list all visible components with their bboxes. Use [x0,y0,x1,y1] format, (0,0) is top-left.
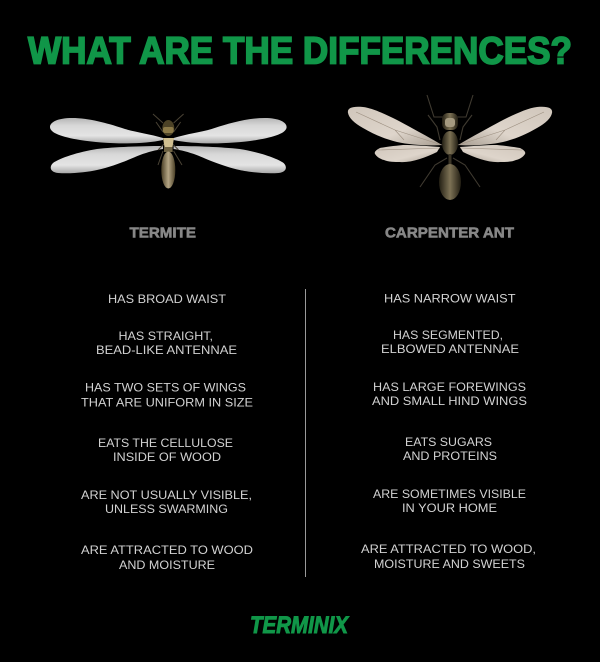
ant fact: waist: HAS NARROW WAIST [384,292,516,306]
ant fact: attraction: ARE ATTRACTED TO WOOD, [361,543,536,556]
ant fact: antennae: ELBOWED ANTENNAE [381,343,519,356]
ant fact: wings [372,381,527,408]
ant body [439,113,461,200]
termite fact: waist: HAS BROAD WAIST [108,293,226,306]
termite right wings [174,118,287,173]
termite fact: antennae: BEAD-LIKE ANTENNAE [96,344,237,357]
termite fact: visibility: ARE NOT USUALLY VISIBLE, [81,489,252,502]
ant fact: antennae [381,329,519,356]
termite fact: wings: THAT ARE UNIFORM IN SIZE [81,396,253,410]
termite fact: antennae [96,330,237,357]
termite fact: diet: EATS THE CELLULOSE [98,437,233,450]
termite fact: antennae: HAS STRAIGHT, [118,330,213,343]
ant antennae and legs [420,95,480,187]
ant fact: diet [403,436,497,463]
ant fact: antennae: HAS SEGMENTED, [393,329,503,342]
illustration: termite [50,114,287,188]
ant fact: wings: AND SMALL HIND WINGS [372,395,527,408]
divider [305,289,306,577]
termite antennae and legs [153,114,184,165]
title: WHAT ARE THE DIFFERENCES? [28,30,572,72]
termite fact: visibility: UNLESS SWARMING [105,503,228,516]
termite fact: diet: INSIDE OF WOOD [113,451,221,464]
termite left wings [50,118,163,173]
termite fact: visibility [81,489,252,516]
ant fact: visibility [373,488,526,515]
termite body [161,120,175,188]
termite fact: attraction: ARE ATTRACTED TO WOOD [81,544,253,557]
label: carpenter ant: CARPENTER ANT [385,224,514,242]
termite fact: diet [98,437,233,464]
ant fact: attraction: MOISTURE AND SWEETS [374,558,525,571]
termite fact: attraction [81,544,253,572]
ant fact: wings: HAS LARGE FOREWINGS [373,381,526,394]
ant fact: diet: EATS SUGARS [405,436,492,449]
ant fact: diet: AND PROTEINS [403,450,497,463]
ant left wings [348,107,442,162]
illustration: carpenter ant [348,95,552,200]
termite fact: attraction: AND MOISTURE [119,559,215,572]
ant right wings [458,107,552,162]
label: termite: TERMITE [130,224,196,242]
termite fact: wings: HAS TWO SETS OF WINGS [85,382,246,394]
logo: Terminix: TERMINIX [250,612,349,639]
ant fact: visibility: IN YOUR HOME [402,502,497,515]
ant fact: visibility: ARE SOMETIMES VISIBLE [373,488,526,501]
ant fact: attraction [361,543,536,571]
termite fact: wings [81,382,253,410]
